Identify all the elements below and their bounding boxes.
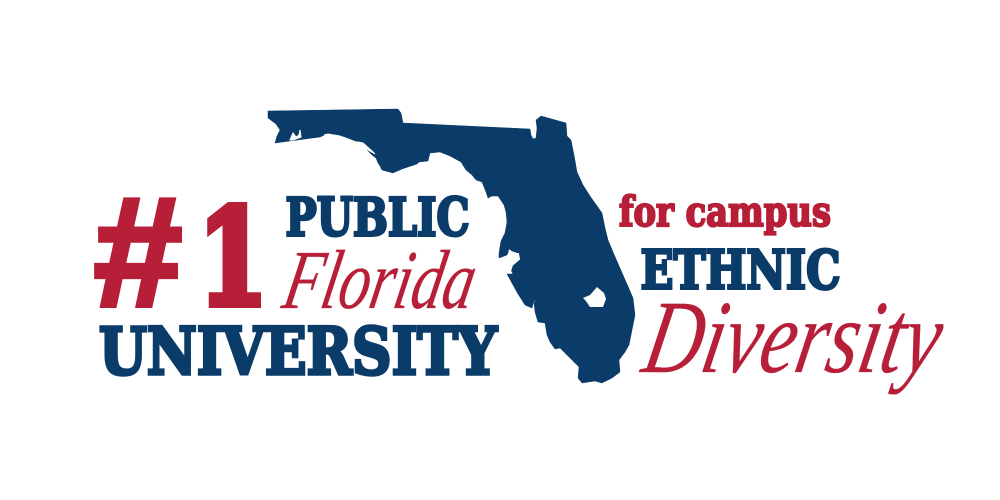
heading: #1: # xyxy=(94,166,182,338)
heading: PUBLIC: PUBLIC xyxy=(286,188,470,248)
heading: #1: 1 xyxy=(198,181,268,336)
lake okeechobee xyxy=(583,287,606,307)
northwest coast bays xyxy=(290,130,380,170)
map: Florida silhouette xyxy=(268,109,635,383)
heading: ETHNIC: ETHNIC xyxy=(640,240,840,302)
script: Florida: Florida xyxy=(276,234,485,327)
heading: for campus: for campus xyxy=(619,188,831,236)
tampa bay xyxy=(509,250,519,271)
heading: #1 xyxy=(94,166,268,338)
heading: UNIVERSITY: UNIVERSITY xyxy=(99,314,497,390)
